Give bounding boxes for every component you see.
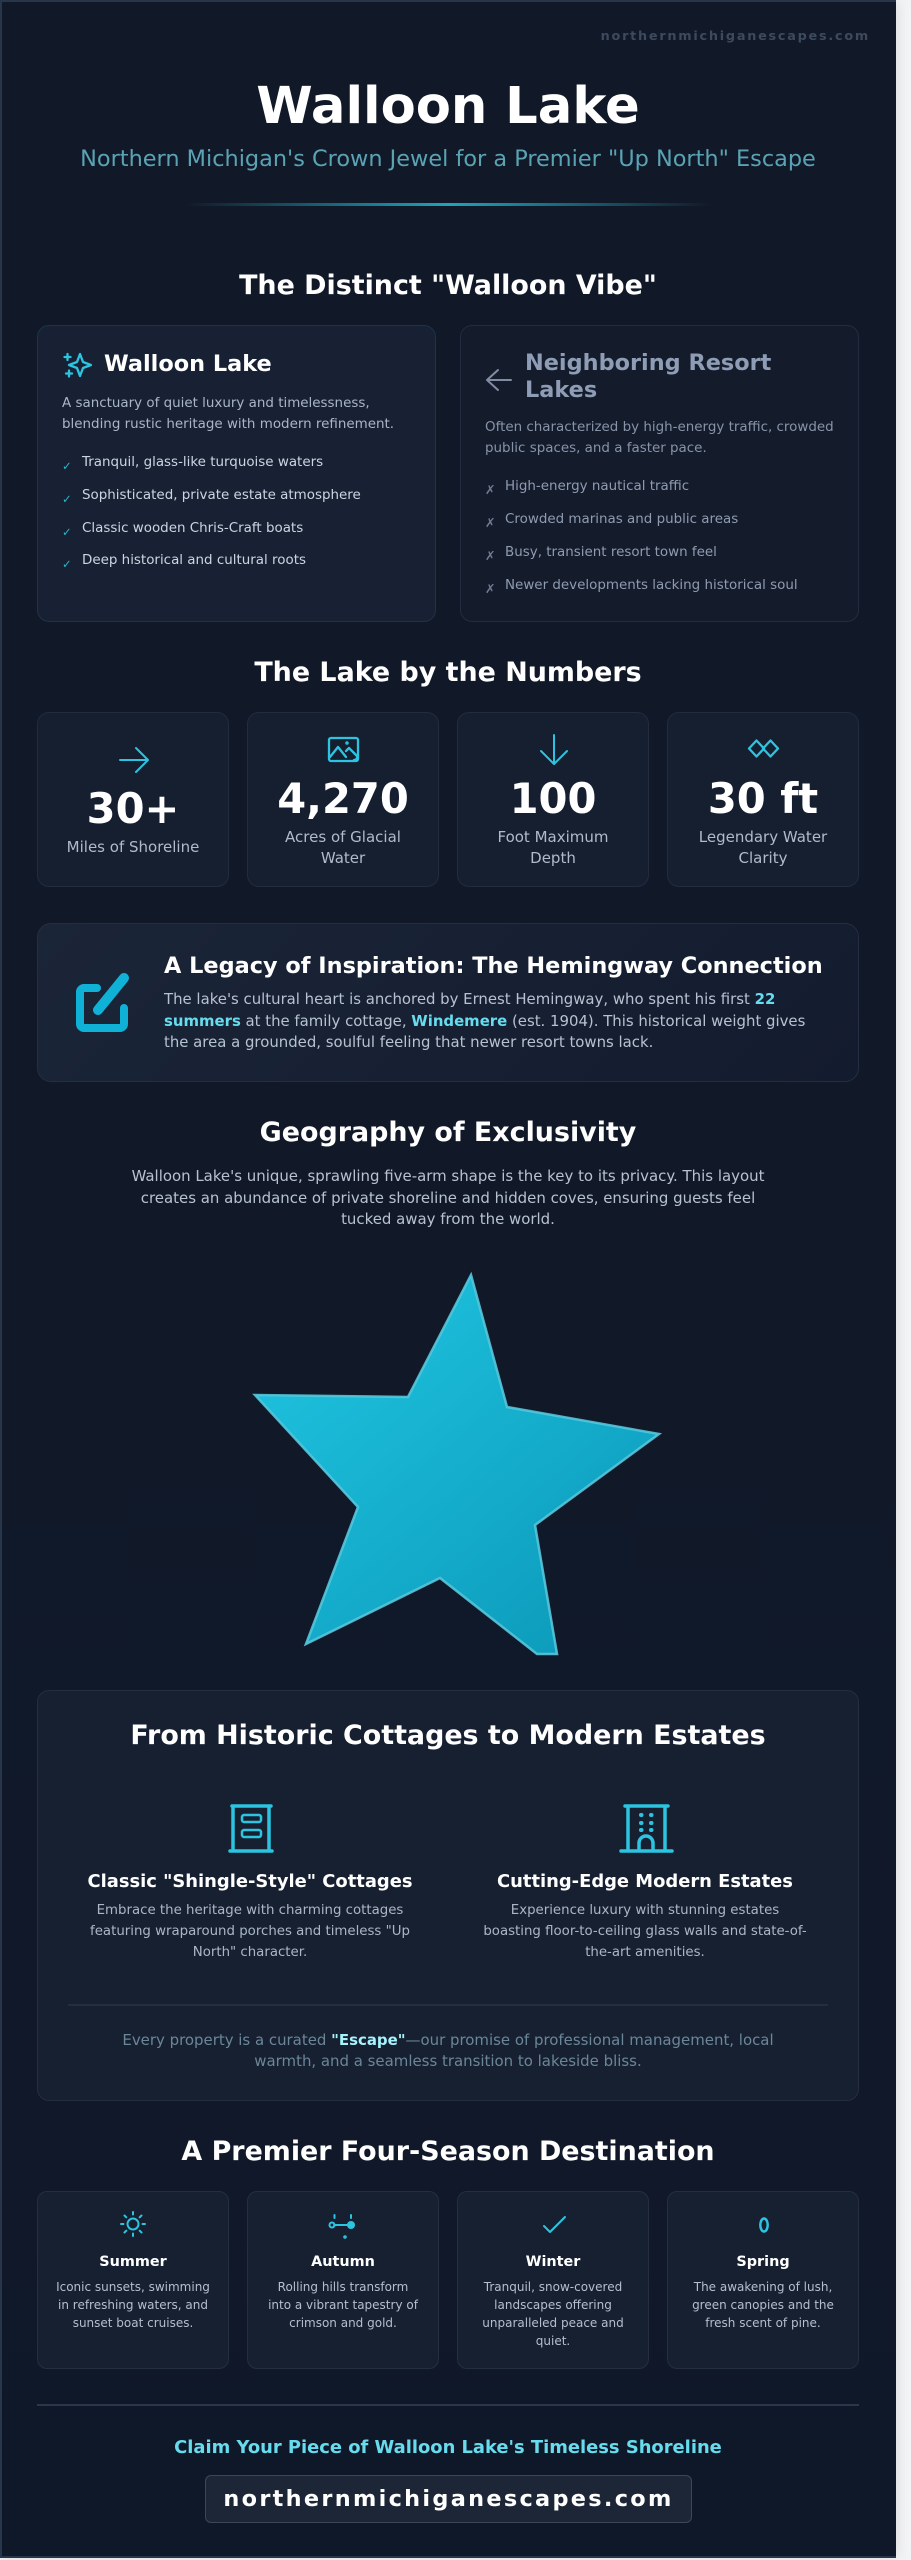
stat label: acres: Acres of Glacial [285,828,401,846]
season card: spring [667,2191,859,2369]
list: Walloon traits [62,455,361,571]
icon: arrow right [119,747,149,773]
estate text: boasting floor-to-ceiling glass walls and state-of- [483,1924,807,1939]
list: neighbor traits [485,479,798,596]
subtitle: Northern Michigan's Crown Jewel for a Premier "Up North" Escape [80,146,816,172]
spring text [692,2280,834,2330]
list: Walloon traits: Classic wooden Chris-Craft boats [82,521,303,536]
site label top right: northernmichiganescapes.com [601,29,870,44]
list: Walloon traits: Sophisticated, private estate atmosphere [82,488,361,503]
estate heading: Cutting-Edge Modern Estates [497,1871,793,1892]
summer text: Iconic sunsets, swimming [56,2280,210,2294]
list: neighbor traits: Crowded marinas and public areas [505,512,738,527]
hemingway heading: A Legacy of Inspiration: The Hemingway Connection [164,953,823,979]
card heading: neighboring: Lakes [525,377,597,403]
season card: autumn [247,2191,439,2369]
list: neighbor traits: ✗ [485,515,495,530]
icon: arrow left [486,369,512,391]
icon: leaf ring [759,2217,769,2233]
escape promise text: warmth, and a seamless transition to lakeside bliss. [254,2052,642,2070]
stat label: shoreline: Miles of Shoreline [67,838,199,856]
geography text [132,1167,764,1228]
website button: northernmichiganescapes.com [223,2486,674,2512]
hemingway text: the area a grounded, soulful feeling that newer resort towns lack. [164,1033,653,1051]
geography text: creates an abundance of private shoreline and hidden coves, ensuring guests feel [141,1188,755,1206]
list: Walloon traits: ✓ [62,459,72,473]
winter text [482,2280,624,2348]
cottage text: North" character. [193,1945,307,1960]
card heading: Walloon Lake: Walloon Lake [104,351,272,377]
list: neighbor traits: ✗ [485,482,495,497]
card text: often [485,420,834,456]
list: neighbor traits: High-energy nautical traffic [505,479,689,494]
stat label: clarity [699,828,828,867]
season card: summer [37,2191,229,2369]
panel: cottages to estates [37,1690,859,2101]
autumn text: into a vibrant tapestry of [268,2298,418,2312]
escape promise text: Every property is a curated "Escape"—our promise of professional management, local [122,2031,774,2049]
icon: diamonds [748,739,780,758]
icon: sparkles [63,352,92,378]
website button [205,2475,692,2523]
heading: numbers: The Lake by the Numbers [254,657,642,688]
list: Walloon traits: ✓ [62,525,72,539]
icon: sun [120,2211,146,2237]
hemingway text: summers at the family cottage, Windemere (est. 1904). This historical weight gives [164,1012,805,1030]
autumn text: Rolling hills transform [278,2280,408,2294]
estate text: the-art amenities. [585,1945,705,1960]
icon: pencil square [76,973,129,1032]
panel: Neighboring Resort Lakes [460,325,859,622]
hemingway text [164,990,805,1051]
panel: Walloon Lake [37,325,436,622]
winter text: landscapes offering [494,2298,612,2312]
stat: 4,270: 4,270 [277,774,409,823]
list: neighbor traits: Busy, transient resort town feel [505,545,717,560]
autumn text [268,2280,418,2330]
heading: geography: Geography of Exclusivity [260,1117,636,1148]
list: neighbor traits: ✗ [485,548,495,563]
stat label: depth: Depth [530,849,576,867]
geography text: Walloon Lake's unique, sprawling five-arm shape is the key to its privacy. This layout [132,1167,764,1185]
icon: arrow down [540,734,568,765]
cottage text [90,1903,410,1960]
summer text: sunset boat cruises. [73,2316,193,2330]
stat: 30+: 30+ [87,784,179,833]
stat label: depth: Foot Maximum [497,828,608,846]
card text: often: public spaces, and a faster pace. [485,441,707,456]
winter text: Tranquil, snow-covered [484,2280,622,2294]
spring text: The awakening of lush, [694,2280,832,2294]
stat label: depth [497,828,608,867]
estate text [483,1903,807,1960]
list: neighbor traits: Newer developments lacking historical soul [505,578,798,593]
stat label: acres: Water [321,849,365,867]
estate text: Experience luxury with stunning estates [511,1903,779,1918]
heading: vibe: The Distinct "Walloon Vibe" [239,270,657,301]
list: Walloon traits: ✓ [62,492,72,506]
card text: sanctuary: A sanctuary of quiet luxury and timelessness, [62,396,370,411]
call to action: Claim Your Piece of Walloon Lake's Timeless Shoreline [174,2437,722,2458]
title: Walloon Lake [256,76,640,136]
cottage text: featuring wraparound porches and timeless "Up [90,1924,410,1939]
geography text: tucked away from the world. [341,1210,555,1228]
stat label: clarity: Clarity [739,849,787,867]
icon: cottage [228,1804,274,1853]
icon: modern building [619,1804,674,1853]
list: neighbor traits: ✗ [485,581,495,596]
glowing divider [185,203,712,206]
icon: wind dots [328,2214,355,2239]
cottage heading: Classic "Shingle-Style" Cottages [87,1871,412,1892]
spring text: green canopies and the [692,2298,834,2312]
stat: 100: 100 [510,774,596,823]
season card: winter [457,2191,649,2369]
heading: seasons: A Premier Four-Season Destination [181,2136,715,2167]
list: Walloon traits: Tranquil, glass-like turquoise waters [82,455,323,470]
lake shape: star map [252,1272,662,1656]
stat label: clarity: Legendary Water [699,828,827,846]
cottage text: Embrace the heritage with charming cottages [97,1903,403,1918]
spring name: Spring [736,2254,790,2270]
stat card: depth [457,712,649,887]
card heading: neighboring: Neighboring Resort [525,350,771,376]
stat card: acres [247,712,439,887]
icon: check [543,2216,566,2233]
summer name: Summer [99,2254,167,2270]
escape promise text [122,2031,774,2070]
card heading: neighboring [525,350,771,403]
list: Walloon traits: ✓ [62,557,72,571]
list: Walloon traits: Deep historical and cultural roots [82,553,306,568]
summer text [56,2280,210,2330]
stat card: clarity [667,712,859,887]
stat: 30 ft: 30 ft [708,774,818,823]
autumn text: crimson and gold. [289,2316,397,2330]
autumn name: Autumn [311,2254,375,2270]
winter text: unparalleled peace and [482,2316,624,2330]
spring text: fresh scent of pine. [705,2316,821,2330]
icon: image [328,736,360,762]
stat card: shoreline [37,712,229,887]
winter name: Winter [526,2254,580,2270]
card text: sanctuary: blending rustic heritage with modern refinement. [62,417,394,432]
hemingway text: The lake's cultural heart is anchored by Ernest Hemingway, who spent his first 22 [164,990,775,1008]
panel heading: From Historic Cottages to Modern Estates [130,1720,766,1751]
card text: often: Often characterized by high-energy traffic, crowded [485,420,834,435]
card text: sanctuary [62,396,394,432]
stat label: acres [285,828,401,867]
panel: Hemingway callout [37,923,859,1082]
winter text: quiet. [536,2334,570,2348]
summer text: in refreshing waters, and [58,2298,208,2312]
